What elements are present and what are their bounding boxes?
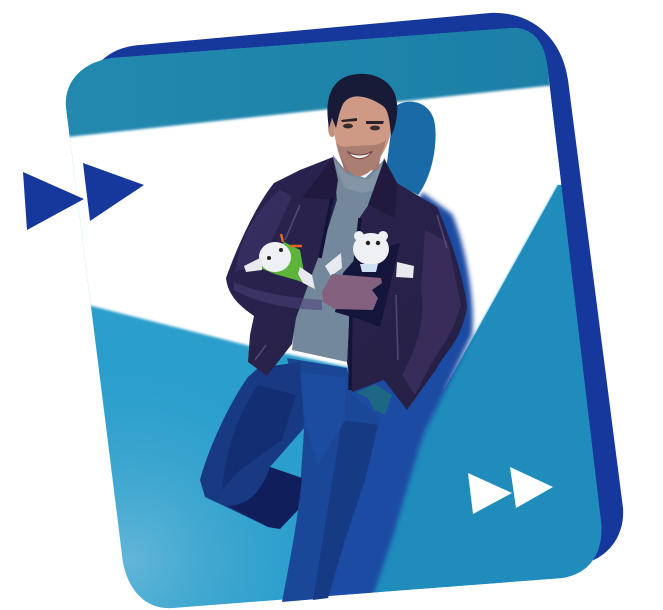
right sleeve sheen [402, 230, 461, 395]
hand holding toys [322, 274, 382, 310]
thigh shade [222, 385, 296, 490]
left forearm sheen [234, 282, 322, 310]
orange antennae [281, 234, 302, 246]
arrows: white double play [468, 467, 553, 514]
toy bow tie [360, 264, 378, 272]
sweater neck fold [333, 160, 384, 193]
arrow four [510, 467, 553, 508]
toy head [353, 233, 389, 265]
jacket highlights [255, 205, 447, 360]
arrow one [23, 172, 84, 230]
pants [200, 358, 381, 602]
toy eyes [267, 256, 271, 260]
right leg [282, 358, 381, 602]
neck [338, 150, 382, 172]
toy eyes [366, 241, 370, 245]
front panel: photo card [66, 28, 602, 608]
black suit [335, 243, 400, 327]
toy ears [354, 231, 364, 241]
arrow two [83, 163, 144, 221]
top teal band [66, 28, 550, 137]
lower bent leg shade [228, 467, 302, 529]
mouth [348, 151, 372, 159]
eyes [343, 124, 353, 128]
waist highlight [300, 372, 345, 465]
right leg dark half [313, 420, 378, 600]
face [334, 92, 391, 176]
ear [328, 119, 336, 137]
hand in pocket [356, 384, 392, 415]
head shadow on wall [385, 102, 436, 195]
lower left light glow [104, 412, 274, 608]
arrows: navy double play [23, 163, 144, 230]
stubble [336, 140, 386, 176]
wall shadow of body [320, 192, 473, 600]
lower right wall wedge [350, 180, 620, 600]
hair [327, 74, 397, 136]
person [200, 74, 467, 602]
head [327, 74, 397, 176]
right sliver of teal beside the white band [548, 68, 562, 186]
jacket collar [302, 157, 397, 218]
back panel: navy rounded card [100, 13, 623, 562]
gray turtleneck sweater [292, 155, 385, 362]
arrow three [468, 473, 512, 514]
toy head [259, 242, 291, 272]
bent left leg [200, 362, 304, 529]
zipper edges [320, 198, 360, 390]
leather jacket [226, 157, 467, 410]
green plush toy [244, 234, 315, 289]
white light band [70, 84, 561, 389]
toy hand right [298, 267, 315, 289]
toy hand left [244, 257, 262, 272]
eyebrows [341, 118, 384, 124]
green suit [260, 242, 315, 287]
toy arms [325, 253, 414, 278]
left sleeve sheen [235, 190, 292, 272]
tuxedo plush toy [325, 231, 414, 327]
